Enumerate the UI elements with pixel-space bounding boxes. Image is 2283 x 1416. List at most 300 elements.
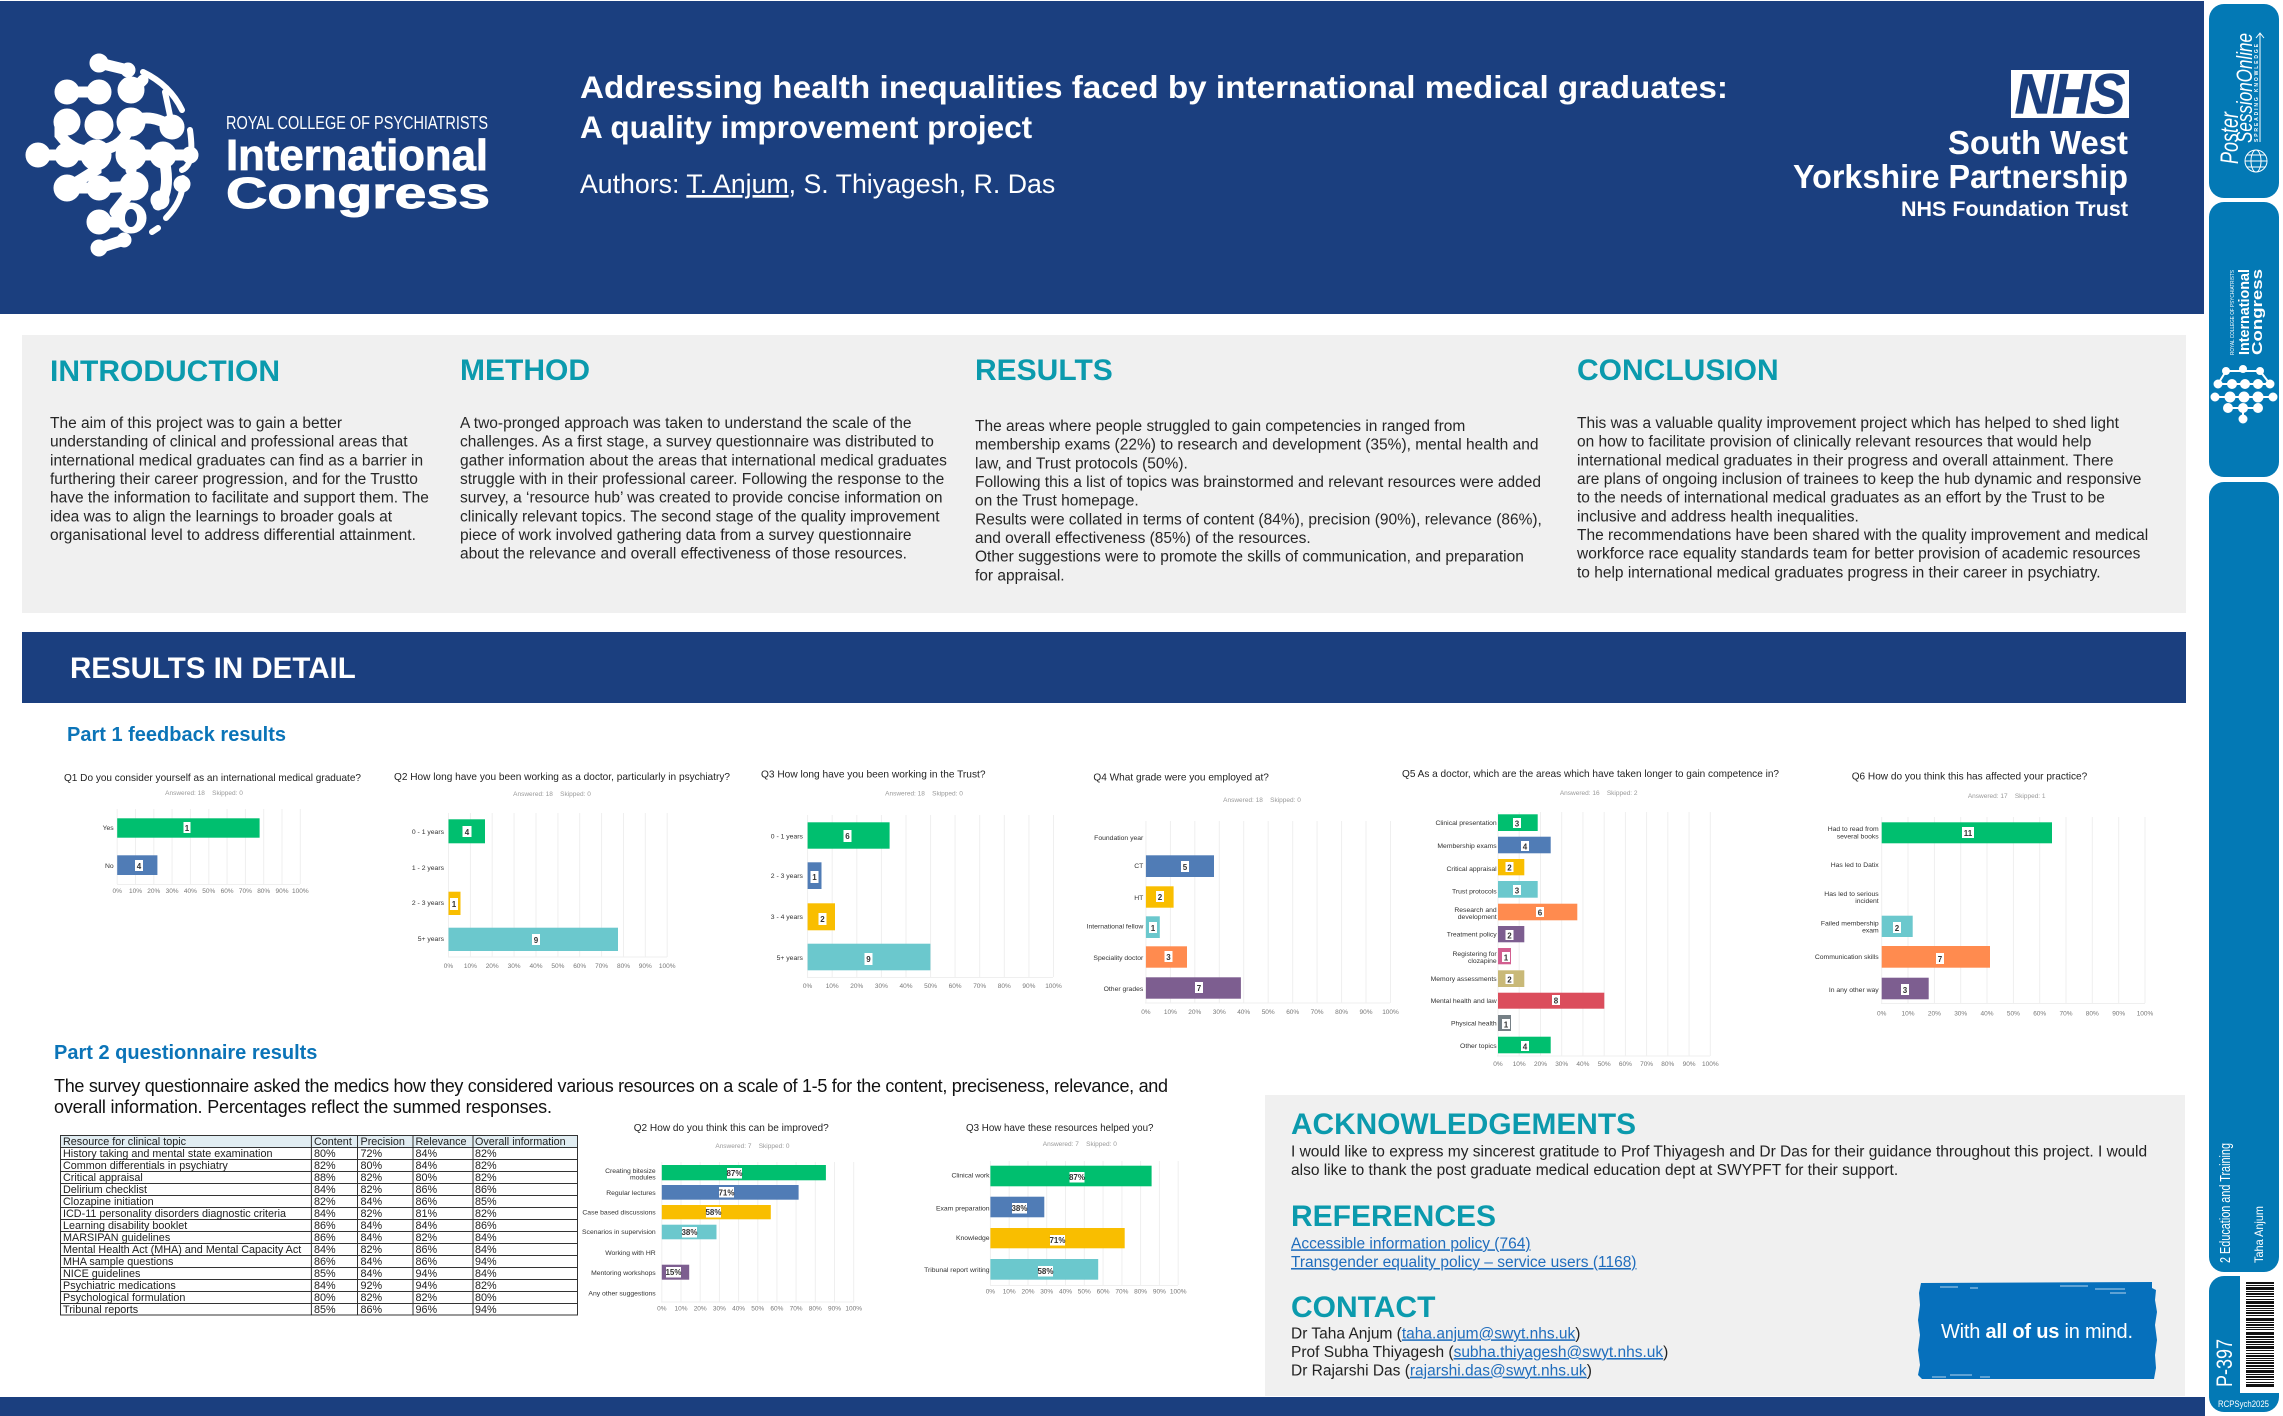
chart: Q5 areas taking longer: 50%: [1598, 1061, 1611, 1068]
chart: Q5 areas taking longer: [1402, 768, 1779, 1068]
chart: Q5 areas taking longer: 6: [1538, 908, 1543, 918]
chart: Q3 time in the Trust: 3 - 4 years: [771, 914, 804, 921]
chart: part 2 Q3 how resources helped: 100%: [1170, 1288, 1187, 1296]
chart: Q2 years as a doctor: 20%: [486, 963, 499, 970]
table: resources by score: 84%: [360, 1196, 383, 1208]
sidebar: Poster Session Online: [2209, 4, 2279, 198]
table: resources by score: 82%: [314, 1160, 336, 1172]
chart: part 2 Q2 improvements: 15%: [665, 1268, 682, 1277]
poster title: [580, 69, 1728, 145]
table: resources by score: 94%: [416, 1280, 438, 1292]
chart: part 2 Q2 improvements: Mentoring workshops: [591, 1270, 656, 1277]
chart: Q4 grade: 60%: [1286, 1009, 1299, 1016]
chart: part 2 Q3 how resources helped: 10%: [1003, 1288, 1016, 1296]
chart: Q4 grade: 30%: [1213, 1009, 1226, 1016]
table: resources by score: 82%: [416, 1232, 438, 1244]
chart: part 2 Q3 how resources helped: 71%: [1049, 1236, 1066, 1245]
table: resources by score: Relevance: [416, 1136, 467, 1148]
chart: Q2 years as a doctor: 4: [465, 828, 470, 837]
table: resources by score: 81%: [416, 1208, 438, 1220]
table: resources by score: 80%: [314, 1148, 336, 1160]
chart: Q6 effect on practice: 0%: [1877, 1010, 1887, 1018]
chart: part 2 Q2 improvements: 87%: [726, 1169, 743, 1178]
chart: Q6 effect on practice: 7: [1938, 955, 1943, 964]
table: resources by score: Precision: [360, 1136, 405, 1148]
section: results: [975, 354, 1542, 584]
chart: Q6 effect on practice: 3: [1903, 986, 1908, 995]
table: resources by score: 84%: [360, 1220, 383, 1232]
chart: Q3 time in the Trust: 80%: [998, 983, 1011, 990]
chart: Q5 areas taking longer: Trust protocols: [1452, 888, 1497, 896]
chart: Q5 areas taking longer: 8: [1554, 996, 1559, 1006]
panel: summary sections: [22, 335, 2186, 613]
section: conclusion: CONCLUSION: [1577, 354, 1779, 387]
sidebar: topic and presenter: Taha Anjum: [2252, 1206, 2266, 1263]
chart: Q5 areas taking longer: Other topics: [1460, 1043, 1497, 1050]
table: resources by score: History taking and mental state examination: [63, 1148, 272, 1160]
chart: Q2 years as a doctor: [394, 771, 730, 970]
table: resources by score: 84%: [416, 1160, 438, 1172]
sidebar: Poster Session Online: SPREADING KNOWLEDGE: [2254, 43, 2260, 142]
chart: part 2 Q3 how resources helped: Clinical work: [951, 1172, 990, 1180]
logo wordmark: Congress: [226, 169, 490, 218]
section: references: Transgender equality policy – service users (1168): [1291, 1254, 1636, 1271]
section: references: Accessible information policy (764): [1291, 1235, 1530, 1252]
chart: Q5 areas taking longer: Membership exams: [1437, 843, 1497, 850]
chart: Q6 effect on practice: exam: [1862, 928, 1879, 934]
chart: Q1 international medical graduate: Answered: 18 Skipped: 0: [165, 790, 243, 797]
chart: part 2 Q2 improvements: Answered: 7 Skipped: 0: [715, 1143, 790, 1150]
table: resources by score: Psychological formulation: [63, 1292, 185, 1304]
chart: part 2 Q3 how resources helped: 38%: [1011, 1204, 1028, 1213]
chart: Q1 international medical graduate: Yes: [103, 825, 114, 832]
chart: Q3 time in the Trust: 6: [845, 832, 850, 841]
chart: Q3 time in the Trust: 70%: [973, 983, 986, 990]
chart: Q1 international medical graduate: 20%: [147, 888, 161, 895]
section: introduction: international medical graduates can find as a barrier in: [50, 452, 423, 469]
table: resources by score: 94%: [475, 1304, 497, 1316]
table: resources by score: 84%: [475, 1232, 497, 1244]
logo wordmark: ROYAL COLLEGE OF PSYCHIATRISTS: [226, 113, 488, 133]
table: resources by score: 80%: [360, 1160, 383, 1172]
heading bar: results in detail: RESULTS IN DETAIL: [70, 652, 356, 685]
chart: part 2 Q2 improvements: 20%: [694, 1306, 707, 1312]
table: resources by score: 82%: [360, 1208, 383, 1220]
sidebar: [2209, 4, 2280, 1412]
section: conclusion: to the needs of international medical graduates as an effort by the Trust to be: [1577, 490, 2105, 507]
chart: Q6 effect on practice: 2: [1895, 924, 1900, 933]
chart: part 2 Q2 improvements: Working with HR: [605, 1250, 656, 1257]
section: contact: Dr Rajarshi Das (rajarshi.das@swyt.nhs.uk): [1291, 1363, 1592, 1380]
sidebar: topic and presenter: 2 Education and Training: [2217, 1143, 2234, 1263]
table: resources by score: 94%: [475, 1256, 497, 1268]
NHS trust logo: NHS Foundation Trust: [1901, 198, 2128, 221]
chart: Q4 grade: HT: [1134, 895, 1143, 902]
chart: Q5 areas taking longer: 1: [1504, 1020, 1509, 1030]
poster title: A quality improvement project: [580, 109, 1033, 145]
chart: Q1 international medical graduate: 4: [137, 862, 142, 871]
chart: Q4 grade: 80%: [1335, 1009, 1348, 1016]
chart: Q4 grade: [1087, 772, 1399, 1016]
table: resources by score: 72%: [360, 1148, 383, 1160]
section: results: The areas where people struggled to gain competencies in ranged from: [975, 418, 1465, 435]
chart: part 2 Q2 improvements: Case based discussions: [582, 1210, 656, 1216]
table: resources by score: 84%: [416, 1148, 438, 1160]
chart: Q3 time in the Trust: 9: [866, 955, 871, 964]
section: conclusion: [1576, 354, 2148, 581]
chart: Q5 areas taking longer: 3: [1515, 820, 1520, 828]
sidebar: Poster Session Online: Poster: [2216, 111, 2244, 164]
chart: Q2 years as a doctor: 80%: [617, 963, 630, 970]
chart: Q5 areas taking longer: 4: [1523, 842, 1528, 852]
chart: Q2 years as a doctor: Q2 How long have you been working as a doctor, particularly in psychiatry?: [394, 771, 730, 783]
section: introduction: The aim of this project was to gain a better: [50, 415, 342, 432]
section: results: law, and Trust protocols (50%).: [975, 455, 1188, 472]
chart: Q1 international medical graduate: 70%: [239, 888, 252, 895]
chart: part 2 Q2 improvements: Q2 How do you think this can be improved?: [634, 1122, 829, 1134]
table: resources by score: Tribunal reports: [63, 1304, 139, 1316]
table: resources by score: 86%: [475, 1184, 497, 1196]
section: conclusion: The recommendations have been shared with the quality improvement and medical: [1577, 527, 2148, 544]
heading: part 1: Part 1 feedback results: [67, 724, 286, 746]
sidebar: International Congress: International: [2236, 269, 2253, 355]
logo wordmark: [226, 113, 490, 218]
table: resources by score: 82%: [360, 1184, 383, 1196]
chart: Q5 areas taking longer: Answered: 16 Skipped: 2: [1560, 790, 1638, 797]
chart: part 2 Q2 improvements: modules: [630, 1174, 656, 1182]
table: resources by score: Clozapine initiation: [63, 1196, 154, 1208]
section: acknowledgements: ACKNOWLEDGEMENTS: [1291, 1108, 1636, 1141]
chart: part 2 Q3 how resources helped: 60%: [1097, 1288, 1110, 1296]
table: resources by score: 84%: [314, 1280, 336, 1292]
chart: Q4 grade: 90%: [1359, 1009, 1373, 1016]
chart: part 2 Q2 improvements: 60%: [770, 1306, 784, 1312]
chart: part 2 Q2 improvements: 30%: [713, 1306, 726, 1312]
table: resources by score: [60, 1135, 578, 1316]
section: acknowledgements: [1291, 1108, 2147, 1179]
chart: part 2 Q2 improvements: 100%: [845, 1306, 862, 1312]
chart: Q2 years as a doctor: 60%: [573, 963, 586, 970]
section: contact: [1291, 1291, 1668, 1380]
chart: Q2 years as a doctor: 0%: [444, 963, 453, 970]
logo wordmark: International: [226, 131, 488, 180]
text block: survey explanation: overall information. Percentages reflect the summed responses.: [54, 1097, 552, 1117]
table: resources by score: 80%: [475, 1292, 497, 1304]
chart: Q1 international medical graduate: 30%: [166, 888, 179, 895]
table: resources by score: 86%: [360, 1304, 383, 1316]
chart: Q6 effect on practice: 80%: [2086, 1010, 2099, 1018]
table: resources by score: 86%: [475, 1220, 497, 1232]
table: resources by score: MHA sample questions: [63, 1256, 174, 1268]
section: method: survey, a ‘resource hub’ was created to provide concise information on: [460, 490, 942, 507]
section: conclusion: are plans of ongoing inclusion of trainees to keep the hub dynamic and responsive: [1577, 471, 2141, 488]
table: resources by score: Resource for clinical topic: [63, 1136, 187, 1148]
chart: Q5 areas taking longer: 2: [1507, 976, 1512, 984]
chart: part 2 Q3 how resources helped: 40%: [1059, 1288, 1072, 1296]
table: resources by score: NICE guidelines: [63, 1268, 141, 1280]
chart: Q2 years as a doctor: 9: [534, 936, 539, 945]
chart: Q6 effect on practice: 100%: [2137, 1010, 2154, 1018]
heading bar: results in detail: [22, 632, 2186, 703]
sidebar: International Congress: Congress: [2249, 269, 2266, 355]
section: results: Other suggestions were to promote the skills of communication, and preparation: [975, 549, 1524, 566]
section: method: clinically relevant topics. The second stage of the quality improvement: [460, 508, 940, 525]
chart: Q2 years as a doctor: 90%: [639, 963, 652, 970]
table: resources by score: 82%: [314, 1196, 336, 1208]
chart: Q1 international medical graduate: Q1 Do you consider yourself as an international medical graduate?: [64, 772, 361, 784]
section: references: [1291, 1200, 1636, 1271]
callout: with all of us in mind: With all of us in mind.: [1941, 1321, 2133, 1343]
chart: part 2 Q3 how resources helped: Q3 How have these resources helped you?: [966, 1122, 1154, 1134]
section: contact: Dr Taha Anjum (taha.anjum@swyt.nhs.uk): [1291, 1325, 1580, 1342]
section: introduction: [50, 355, 429, 544]
table: resources by score: 82%: [360, 1172, 383, 1184]
chart: part 2 Q2 improvements: Scenarios in supervision: [582, 1229, 656, 1236]
panel: acknowledgements, references, contact: [1265, 1095, 2185, 1396]
table: resources by score: 86%: [314, 1232, 336, 1244]
chart: Q3 time in the Trust: 100%: [1045, 983, 1062, 990]
chart: Q2 years as a doctor: 50%: [551, 963, 565, 970]
table: resources by score: Psychiatric medications: [63, 1280, 176, 1292]
section: introduction: understanding of clinical and professional areas that: [50, 434, 408, 451]
section: introduction: INTRODUCTION: [50, 355, 280, 388]
chart: Q4 grade: 50%: [1262, 1009, 1275, 1016]
chart: Q2 years as a doctor: 5+ years: [418, 936, 445, 943]
section: results: Results were collated in terms of content (84%), precision (90%), relevance (86%),: [975, 511, 1542, 528]
chart: Q1 international medical graduate: 60%: [221, 888, 234, 895]
section: results: and overall effectiveness (85%) of the resources.: [975, 530, 1311, 547]
chart: part 2 Q2 improvements: 0%: [657, 1306, 667, 1312]
chart: part 2 Q2 improvements: Creating bitesize: [605, 1168, 656, 1175]
chart: Q6 effect on practice: Failed membership: [1821, 920, 1879, 928]
chart: part 2 Q3 how resources helped: 80%: [1134, 1288, 1147, 1296]
chart: Q4 grade: 0%: [1141, 1009, 1151, 1016]
chart: Q3 time in the Trust: 30%: [875, 983, 888, 990]
NHS trust logo: [1793, 62, 2129, 221]
chart: part 2 Q3 how resources helped: [924, 1122, 1187, 1296]
callout: with all of us in mind: [1918, 1282, 2157, 1379]
table: resources by score: 82%: [475, 1208, 497, 1220]
table: resources by score: Mental Health Act (MHA) and Mental Capacity Act: [63, 1244, 301, 1256]
text block: survey explanation: The survey questionnaire asked the medics how they considered various resources on a scale of 1-5 for the content, preciseness, relevance, and: [54, 1076, 1168, 1096]
chart: Q6 effect on practice: several books: [1837, 834, 1879, 840]
table: resources by score: Delirium checklist: [63, 1184, 147, 1196]
chart: part 2 Q2 improvements: 58%: [705, 1208, 722, 1217]
chart: Q4 grade: 20%: [1188, 1009, 1202, 1016]
chart: Q1 international medical graduate: 80%: [257, 888, 270, 895]
chart: Q6 effect on practice: [1815, 770, 2154, 1018]
chart: Q5 areas taking longer: 0%: [1493, 1061, 1503, 1068]
chart: Q1 international medical graduate: 90%: [275, 888, 289, 895]
chart: Q6 effect on practice: Answered: 17 Skipped: 1: [1968, 793, 2046, 800]
chart: Q5 areas taking longer: Registering for: [1452, 951, 1497, 958]
chart: part 2 Q3 how resources helped: 90%: [1153, 1288, 1166, 1296]
table: resources by score: 86%: [314, 1220, 336, 1232]
table: resources by score: 84%: [475, 1268, 497, 1280]
chart: part 2 Q2 improvements: 90%: [828, 1306, 841, 1312]
chart: Q6 effect on practice: Communication skills: [1815, 954, 1879, 961]
poster title: Addressing health inequalities faced by international medical graduates:: [580, 69, 1728, 105]
table: resources by score: MARSIPAN guidelines: [63, 1232, 171, 1244]
chart: part 2 Q3 how resources helped: Exam preparation: [936, 1206, 990, 1212]
authors: Authors: T. Anjum, S. Thiyagesh, R. Das: [580, 169, 1055, 199]
section: results: membership exams (22%) to research and development (35%), mental health and: [975, 437, 1538, 454]
chart: Q4 grade: 2: [1158, 893, 1163, 902]
chart: part 2 Q2 improvements: 40%: [732, 1306, 745, 1312]
table: resources by score: 85%: [314, 1268, 336, 1280]
chart: part 2 Q2 improvements: Regular lectures: [606, 1190, 656, 1197]
chart: Q4 grade: 10%: [1164, 1009, 1177, 1016]
chart: Q6 effect on practice: incident: [1855, 898, 1879, 905]
sidebar: topic and presenter: [2209, 482, 2279, 1272]
chart: Q2 years as a doctor: 40%: [529, 963, 543, 970]
section: introduction: have the information to facilitate and support them. The: [50, 490, 429, 507]
section: method: METHOD: [460, 354, 590, 387]
section: method: about the relevance and overall effectiveness of those resources.: [460, 546, 907, 563]
chart: Q1 international medical graduate: 40%: [184, 888, 197, 895]
chart: Q3 time in the Trust: 10%: [826, 983, 839, 990]
chart: Q5 areas taking longer: 2: [1507, 932, 1512, 940]
section: conclusion: inclusive and address health inequalities.: [1577, 508, 1859, 525]
chart: Q3 time in the Trust: [761, 768, 1062, 990]
chart: part 2 Q2 improvements: 10%: [674, 1306, 688, 1312]
table: resources by score: 86%: [314, 1256, 336, 1268]
section: results: Following this a list of topics was brainstormed and relevant resources were added: [975, 474, 1541, 491]
chart: part 2 Q3 how resources helped: 0%: [986, 1288, 995, 1296]
chart: Q5 areas taking longer: 60%: [1619, 1061, 1632, 1068]
table: resources by score: 84%: [314, 1184, 336, 1196]
chart: Q5 areas taking longer: Research and: [1454, 907, 1497, 914]
table: resources by score: 86%: [416, 1244, 438, 1256]
table: resources by score: 84%: [360, 1256, 383, 1268]
sidebar: International Congress: [2209, 202, 2279, 477]
chart: Q4 grade: Foundation year: [1094, 835, 1144, 842]
chart: Q1 international medical graduate: [64, 772, 361, 895]
NHS trust logo: Yorkshire Partnership: [1793, 158, 2128, 195]
chart: Q6 effect on practice: In any other way: [1829, 987, 1879, 994]
chart: Q5 areas taking longer: clozapine: [1468, 958, 1497, 965]
chart: Q2 years as a doctor: 1: [452, 900, 457, 909]
table: resources by score: ICD-11 personality disorders diagnostic criteria: [63, 1208, 286, 1220]
section: introduction: idea was to align the learnings to broader goals at: [50, 508, 393, 525]
chart: Q4 grade: 5: [1183, 863, 1188, 872]
chart: Q5 areas taking longer: 3: [1515, 886, 1520, 896]
chart: part 2 Q2 improvements: Any other suggestions: [588, 1290, 656, 1298]
section: introduction: furthering their career progression, and for the Trustto: [50, 471, 418, 488]
table: resources by score: 85%: [314, 1304, 336, 1316]
chart: Q3 time in the Trust: 5+ years: [777, 955, 803, 962]
table: resources by score: Learning disability booklet: [63, 1220, 187, 1232]
chart: Q5 areas taking longer: Physical health: [1451, 1020, 1497, 1028]
chart: Q3 time in the Trust: 90%: [1022, 983, 1036, 990]
table: resources by score: 80%: [416, 1172, 438, 1184]
table: resources by score: 82%: [416, 1292, 438, 1304]
chart: Q2 years as a doctor: 0 - 1 years: [412, 829, 445, 836]
section: method: A two-pronged approach was taken to understand the scale of the: [460, 415, 912, 432]
chart: Q5 areas taking longer: development: [1458, 914, 1497, 921]
table: resources by score: 92%: [360, 1280, 383, 1292]
chart: Q4 grade: International fellow: [1087, 924, 1143, 930]
table: resources by score: 84%: [360, 1232, 383, 1244]
table: resources by score: 82%: [360, 1244, 383, 1256]
chart: Q5 areas taking longer: 40%: [1576, 1061, 1590, 1068]
chart: Q5 areas taking longer: 30%: [1555, 1061, 1568, 1068]
sidebar: poster number and barcode: [2209, 1275, 2280, 1412]
section: method: piece of work involved gathering data from a survey questionnaire: [460, 527, 911, 544]
chart: Q1 international medical graduate: 1: [185, 824, 190, 833]
chart: Q2 years as a doctor: 30%: [508, 963, 521, 970]
NHS trust logo: South West: [1948, 124, 2128, 161]
table: resources by score: 82%: [475, 1172, 497, 1184]
chart: Q4 grade: 70%: [1311, 1009, 1324, 1016]
table: resources by score: 82%: [475, 1160, 497, 1172]
table: resources by score: 84%: [475, 1244, 497, 1256]
sidebar: poster number and barcode: P-397: [2212, 1339, 2237, 1387]
table: resources by score: 82%: [475, 1280, 497, 1292]
chart: part 2 Q2 improvements: 71%: [718, 1188, 735, 1198]
table: resources by score: 84%: [314, 1244, 336, 1256]
section: results: for appraisal.: [975, 567, 1065, 584]
chart: part 2 Q2 improvements: 70%: [790, 1306, 803, 1312]
chart: Q5 areas taking longer: 4: [1523, 1042, 1528, 1052]
section: results: RESULTS: [975, 354, 1113, 387]
chart: part 2 Q2 improvements: 50%: [751, 1306, 765, 1312]
table: resources by score: 84%: [314, 1208, 336, 1220]
section: conclusion: international medical graduates in their progress and overall attainment. There: [1577, 452, 2114, 469]
chart: Q3 time in the Trust: 60%: [949, 983, 962, 990]
chart: part 2 Q2 improvements: 38%: [681, 1228, 698, 1237]
chart: part 2 Q3 how resources helped: 70%: [1115, 1288, 1129, 1296]
chart: Q3 time in the Trust: 2 - 3 years: [771, 873, 804, 880]
chart: Q1 international medical graduate: 0%: [112, 888, 122, 895]
section: method: [460, 354, 947, 563]
section: conclusion: workforce race equality standards team for better provision of academic resources: [1576, 546, 2141, 563]
chart: part 2 Q3 how resources helped: Tribunal report writing: [924, 1267, 990, 1274]
chart: Q3 time in the Trust: 50%: [924, 983, 937, 990]
chart: Q4 grade: 100%: [1382, 1009, 1399, 1016]
chart: Q3 time in the Trust: 0%: [803, 983, 813, 990]
chart: Q6 effect on practice: Has led to serious: [1824, 891, 1879, 898]
chart: Q5 areas taking longer: Treatment policy: [1447, 932, 1497, 938]
chart: Q5 areas taking longer: 10%: [1513, 1061, 1526, 1068]
chart: Q4 grade: 7: [1197, 984, 1202, 993]
chart: Q2 years as a doctor: 70%: [595, 963, 608, 970]
chart: Q5 areas taking longer: 20%: [1534, 1061, 1547, 1068]
header banner: [0, 1, 2204, 314]
chart: part 2 Q3 how resources helped: Knowledge: [956, 1235, 990, 1242]
chart: Q5 areas taking longer: 70%: [1640, 1061, 1653, 1068]
table: resources by score: 86%: [416, 1256, 438, 1268]
chart: Q3 time in the Trust: 40%: [899, 983, 913, 990]
chart: Q6 effect on practice: 50%: [2007, 1010, 2020, 1018]
table: resources by score: Overall information: [475, 1136, 566, 1148]
section: references: REFERENCES: [1291, 1200, 1496, 1233]
section: contact: CONTACT: [1291, 1291, 1435, 1324]
table: resources by score: 88%: [314, 1172, 336, 1184]
chart: Q3 time in the Trust: Answered: 18 Skipped: 0: [885, 790, 963, 798]
chart: Q2 years as a doctor: 2 - 3 years: [412, 900, 445, 907]
chart: Q6 effect on practice: Q6 How do you think this has affected your practice?: [1852, 770, 2087, 782]
chart: Q6 effect on practice: Has led to Datix: [1831, 862, 1879, 869]
chart: Q3 time in the Trust: 1: [812, 873, 817, 882]
chart: Q4 grade: Other grades: [1104, 986, 1144, 993]
chart: Q3 time in the Trust: 20%: [850, 983, 864, 990]
chart: part 2 Q3 how resources helped: 20%: [1021, 1288, 1035, 1296]
chart: Q1 international medical graduate: 100%: [292, 888, 309, 895]
chart: part 2 Q3 how resources helped: 30%: [1040, 1288, 1053, 1296]
section: acknowledgements: also like to thank the post graduate medical education dept at SWYPFT for their support.: [1291, 1162, 1898, 1179]
chart: part 2 Q3 how resources helped: 87%: [1069, 1173, 1085, 1182]
